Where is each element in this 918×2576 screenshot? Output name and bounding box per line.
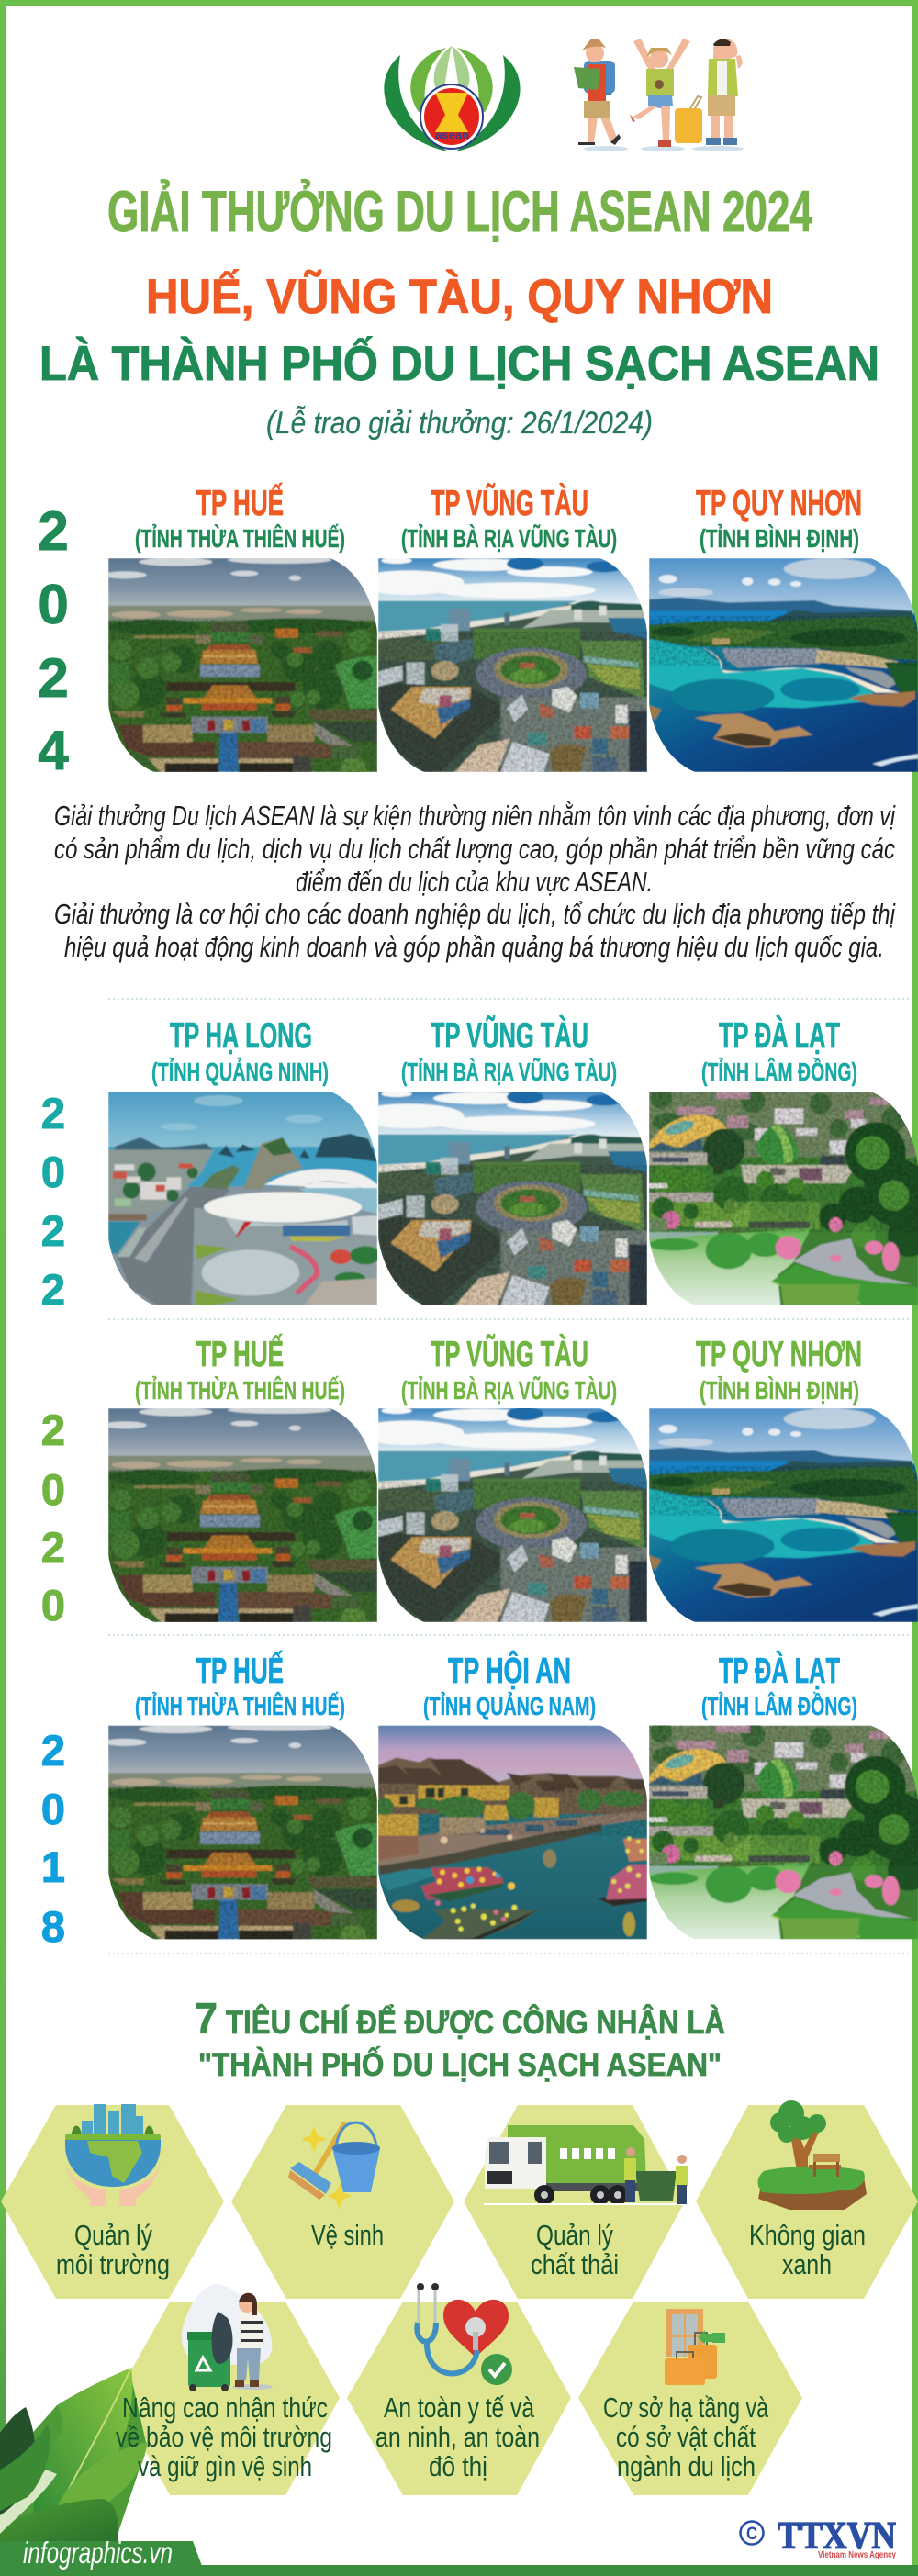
title: winning cities: HUẾ, VŨNG TÀU, QUY NHƠN [146,269,773,324]
icon: tree and bench [758,2100,867,2210]
panel: 2020 TP Quy Nhơn: (TỈNH BÌNH ĐỊNH) [700,1375,859,1405]
photo: Vũng Tàu aerial [353,557,647,772]
year label 2024: 4 [38,720,69,781]
logo: ASEAN emblem with green leaves: asean [435,129,469,141]
photo: Đà Lạt lake [649,1720,918,1939]
panel: criterion green space: Không gian [749,2219,866,2251]
panel: 2020 TP Vũng Tàu [353,1334,647,1622]
heading: 7 criteria [195,1994,725,2083]
panel: 2022 TP Đà Lạt: TP ĐÀ LẠT [719,1015,840,1056]
panel: 2018 TP Huế: (TỈNH THỪA THIÊN HUẾ) [135,1691,345,1720]
logo: TTXVN: TTXVN [778,2515,896,2558]
panel: 2022 TP Hạ Long [108,1016,381,1305]
panel: criterion green space [696,2100,918,2299]
panel: 2024 TP Quy Nhơn: (TỈNH BÌNH ĐỊNH) [700,523,859,553]
icon: woman with recycling bin [182,2284,273,2391]
year label 2022: 0 [41,1148,65,1196]
footer text: infographics.vn: infographics.vn [23,2536,173,2570]
panel: 2018 TP Hội An [375,1650,647,1939]
panel: 2024 TP Vũng Tàu: (TỈNH BÀ RỊA VŨNG TÀU) [401,523,617,553]
panel: 2022 TP Vũng Tàu: TP VŨNG TÀU [431,1015,588,1056]
panel: 2018 TP Hội An: TP HỘI AN [448,1650,571,1691]
photo: Vũng Tàu aerial [353,1091,647,1305]
year label 2020: 0 [41,1465,65,1514]
icon: broom and bucket [288,2122,380,2209]
logo: TTXVN: C [746,2525,757,2544]
text block: award description [54,800,896,963]
logo: TTXVN [740,2515,896,2560]
icon: three tourists [574,39,744,151]
year label 2022: 2 [41,1265,65,1314]
photo: Huế citadel [104,1406,377,1632]
subtitle: ceremony date: (Lễ trao giải thưởng: 26/1/2024) [266,406,653,441]
year label 2020 [41,1406,65,1630]
panel: 2020 TP Huế [104,1334,377,1632]
panel: 2024 TP Quy Nhơn [649,484,918,772]
icon: heart with stethoscope [417,2283,512,2385]
heading: 7 criteria: 7 [195,1994,218,2043]
panel: 2022 TP Đà Lạt [649,1015,918,1305]
logo: ASEAN emblem with green leaves [384,46,521,151]
heading: 7 criteria: TIÊU CHÍ ĐỂ ĐƯỢC CÔNG NHẬN LÀ [226,2004,725,2041]
photo: Vũng Tàu aerial [353,1407,647,1622]
panel: 2024 TP Huế: (TỈNH THỪA THIÊN HUẾ) [135,523,345,553]
panel: 2018 TP Hội An: (TỈNH QUẢNG NAM) [423,1691,596,1720]
year label 2024: 2 [38,647,69,709]
text block: award description: điểm đến du lịch của khu vực ASEAN. [296,866,653,898]
panel: criterion environment management [1,2104,224,2299]
panel: criterion health and safety: an ninh, an toàn [375,2421,540,2453]
icon: window and suitcases [665,2309,725,2385]
photo: Quy Nhơn coast [649,558,918,772]
panel: 2024 TP Vũng Tàu: TP VŨNG TÀU [431,483,588,523]
panel: criterion infrastructure: có sở vật chất [616,2421,756,2453]
photo: Hạ Long [108,1092,381,1305]
panel: criterion health and safety [347,2283,571,2495]
year label 2022: 2 [41,1089,65,1137]
year label 2018: 0 [41,1785,65,1833]
text: awareness criterion label: Nâng cao nhận thức [122,2391,328,2424]
photo: Quy Nhơn coast [649,1408,918,1622]
panel: 2022 TP Vũng Tàu: (TỈNH BÀ RỊA VŨNG TÀU) [401,1057,617,1086]
year label 2020: 2 [41,1406,65,1454]
tourist jumping with arms raised [630,39,690,147]
panel: 2018 TP Đà Lạt [649,1651,918,1939]
panel: criterion environmental awareness [116,2284,340,2495]
heading: 7 criteria: "THÀNH PHỐ DU LỊCH SẠCH ASEAN" [198,2046,722,2083]
panel: 2018 TP Đà Lạt: TP ĐÀ LẠT [719,1651,840,1691]
logo: TTXVN: Vietnam News Agency [818,2550,896,2560]
panel: criterion infrastructure: ngành du lịch [617,2450,756,2482]
panel: criterion infrastructure: Cơ sở hạ tầng và [603,2391,769,2424]
panel: 2022 TP Hạ Long: (TỈNH QUẢNG NINH) [151,1057,329,1086]
decoration: banana leaves [0,2368,147,2543]
panel: 2022 TP Vũng Tàu [353,1015,647,1305]
panel: criterion environment management: Quản lý [74,2219,152,2251]
panel: 2020 TP Vũng Tàu: TP VŨNG TÀU [431,1334,588,1374]
icon: earth in hands [64,2104,161,2206]
footer bar [0,2541,918,2576]
text: awareness criterion label: về bảo vệ môi trường [116,2421,332,2453]
panel: 2024 TP Huế [104,483,377,782]
year label 2022 [41,1089,65,1314]
year label 2022: 2 [41,1206,65,1255]
year label 2020: 2 [41,1523,65,1572]
text: awareness criterion label: và giữ gìn vệ sinh [138,2450,312,2482]
year label 2018: 2 [41,1726,65,1775]
photo: Huế citadel [104,1724,377,1950]
tourist with map [574,39,621,145]
year label 2018: 8 [41,1902,65,1951]
photo: Huế citadel [104,556,377,782]
panel: 2020 TP Huế: (TỈNH THỪA THIÊN HUẾ) [135,1375,345,1405]
panel: criterion sanitation [231,2105,454,2299]
panel: criterion health and safety: An toàn y tế và [384,2391,535,2424]
photo: Đà Lạt lake [649,1087,918,1305]
panel: criterion environment management: môi trường [56,2248,170,2280]
panel: 2020 TP Huế: TP HUẾ [196,1334,284,1374]
panel: 2022 TP Hạ Long: TP HẠ LONG [170,1016,312,1056]
year label 2018 [41,1726,65,1951]
text: awareness criterion label [116,2391,332,2482]
panel: criterion health and safety: đô thị [429,2450,487,2482]
year label 2018: 1 [41,1842,65,1891]
panel: 2020 TP Quy Nhơn [649,1335,918,1622]
year label 2024: 0 [38,574,69,635]
panel: criterion waste management: Quản lý [536,2219,613,2251]
year label 2024 [38,500,69,781]
icon: garbage truck [484,2125,694,2205]
panel: 2018 TP Huế [104,1651,377,1950]
panel: 2024 TP Huế: TP HUẾ [196,483,284,523]
year label 2024: 2 [38,500,69,562]
panel: criterion waste management [464,2105,694,2299]
year label 2020: 0 [41,1581,65,1630]
panel: criterion infrastructure [578,2302,802,2495]
panel: 2020 TP Vũng Tàu: (TỈNH BÀ RỊA VŨNG TÀU) [401,1375,617,1405]
tourist with yellow suitcase [675,39,743,145]
panel: 2018 TP Huế: TP HUẾ [196,1651,284,1691]
panel: 2024 TP Vũng Tàu [353,483,647,772]
panel: criterion sanitation: Vệ sinh [311,2219,384,2251]
panel: criterion green space: xanh [782,2248,832,2280]
photo: Hội An riverside [375,1726,647,1939]
panel: criterion waste management: chất thải [531,2248,619,2280]
